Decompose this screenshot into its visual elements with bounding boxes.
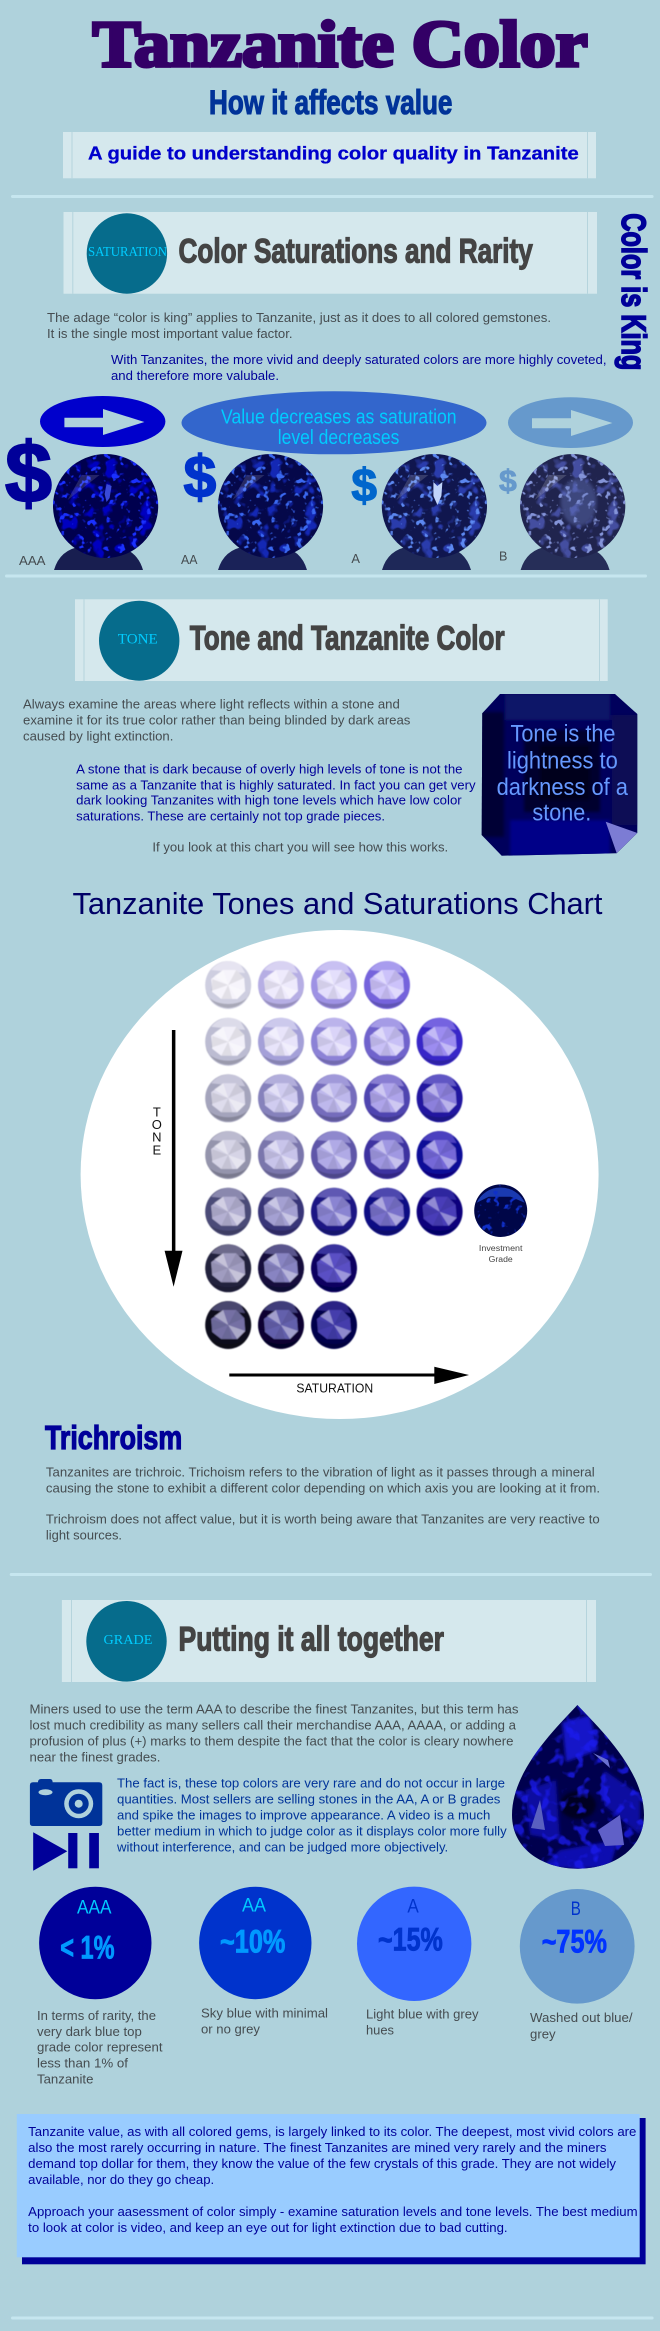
caption: AAA: Tanzanite	[37, 2071, 93, 2086]
text: tone versus saturation: dark looking Tanzanites with high tone levels which have low color	[76, 792, 462, 807]
text: video is better: better medium in which to judge color as it displays color more fully	[117, 1823, 507, 1838]
row: tone 5	[205, 1188, 463, 1236]
grade circle: A: ~15%	[378, 1922, 443, 1958]
vertical label: color is king: Color is King	[614, 213, 652, 370]
chart heading: Tanzanite Tones and Saturations Chart	[72, 886, 603, 921]
panel: tone heading	[75, 599, 608, 681]
chart: tones and saturations	[81, 930, 599, 1419]
caption: AAA: In terms of rarity, the	[37, 2008, 156, 2023]
label: tone axis: T	[153, 1104, 161, 1120]
text: chart lead-in: If you look at this chart you will see how this works.	[152, 839, 448, 854]
row: tone 6	[205, 1244, 357, 1292]
grade circle: AAA: < 1%	[60, 1929, 114, 1965]
caption: AAA: grade color represent	[37, 2039, 163, 2054]
text: color is king intro: It is the single most important value factor.	[47, 326, 292, 341]
label: tone axis: O	[152, 1117, 162, 1132]
grade circle: A	[357, 1887, 471, 2001]
text: examine the stone: examine it for its true color rather than being blinded by dark areas	[23, 712, 411, 727]
gem: AAA	[19, 454, 158, 570]
text: miners: near the finest grades.	[30, 1749, 160, 1764]
caption: AAA: very dark blue top	[37, 2024, 142, 2039]
caption: AA: Sky blue with minimal	[201, 2005, 328, 2020]
row: tone 7	[205, 1301, 357, 1349]
text: trichroism: causing the stone to exhibit a different color depending on which axis you are looking at it from.	[46, 1481, 600, 1496]
guide banner	[63, 132, 596, 178]
text: video is better: quantities. Most sellers are selling stones in the AA, A or B grades	[117, 1791, 501, 1806]
caption: AA: or no grey	[201, 2021, 260, 2036]
icon: dollar medium: $	[184, 444, 216, 510]
summary panel: to look at color is video, and keep an eye out for light extinction due to bad cutting.	[28, 2220, 508, 2235]
grade circle: B: ~75%	[542, 1924, 607, 1960]
arrow oval: light	[508, 397, 633, 448]
label: tone axis: E	[152, 1142, 161, 1158]
text: examine the stone	[23, 696, 411, 743]
grade circle: AAA: AAA	[77, 1897, 112, 1918]
grade circle: B	[520, 1889, 635, 2004]
summary panel: also the most rarely occurring in nature. The finest Tanzanites are mined very rarely and the miners	[28, 2140, 607, 2155]
icon: dollar large: $	[5, 426, 52, 521]
text: miners	[30, 1701, 519, 1764]
gem: B: B	[499, 549, 507, 564]
text: video is better: without interference, and can be judged more objectively.	[116, 1839, 448, 1854]
text: tone versus saturation: A stone that is dark because of overly high levels of tone is not the	[76, 761, 462, 776]
gem callout: tone definition	[480, 692, 640, 858]
panel: grade heading: Putting it all together	[178, 1621, 444, 1659]
text: tone versus saturation	[76, 761, 476, 823]
label: tone axis	[152, 1104, 162, 1158]
caption: B: Washed out blue/	[530, 2010, 633, 2025]
title: Tanzanite Color	[93, 8, 588, 81]
grade circle: A: A	[407, 1896, 419, 1917]
icon: camera	[30, 1779, 102, 1826]
caption: A: Light blue with grey	[366, 2006, 479, 2021]
text: miners: profusion of plus (+) marks to them despite the fact that the color is cleary nowhere	[30, 1733, 514, 1748]
summary panel: available, nor do they go cheap.	[28, 2172, 214, 2187]
text: saturation note: With Tanzanites, the more vivid and deeply saturated colors are more highly coveted,	[111, 352, 606, 367]
subtitle: How it affects value	[209, 84, 452, 122]
icon: dollar smallest: $	[499, 463, 517, 498]
text: video is better: and spike the images to improve appearance. A video is a much	[117, 1807, 490, 1822]
caption: B: grey	[530, 2026, 556, 2041]
panel: grade heading	[62, 1600, 596, 1682]
row: tone 4	[205, 1131, 463, 1179]
callout oval: value decreases: Value decreases as saturation	[221, 406, 457, 428]
text: color is king intro: The adage “color is king” applies to Tanzanite, just as it does to all colored gemstones.	[47, 310, 551, 325]
row: tone 2	[205, 1018, 463, 1066]
text: miners: lost much credibility as many sellers call their merchandise AAA, AAAA, or adding a	[30, 1717, 517, 1732]
label: saturation axis: SATURATION	[296, 1381, 373, 1396]
gem: A	[351, 454, 487, 570]
panel: tone heading: Tone and Tanzanite Color	[190, 620, 505, 658]
heading: trichroism: Trichroism	[45, 1419, 182, 1456]
panel: saturation heading	[64, 212, 597, 294]
text: examine the stone: Always examine the areas where light reflects within a stone and	[23, 696, 400, 711]
panel: tone heading: TONE	[118, 631, 158, 647]
caption: A	[366, 2006, 479, 2037]
panel: grade heading: GRADE	[104, 1633, 152, 1648]
grade circle: AA: AA	[242, 1896, 266, 1917]
gem: investment grade: Grade	[489, 1255, 513, 1264]
panel: saturation heading: SATURATION	[88, 245, 167, 260]
gem: B	[499, 454, 625, 570]
gem callout: tone definition: lightness to	[507, 747, 618, 774]
panel: saturation heading: Color Saturations and Rarity	[178, 233, 533, 271]
caption: B	[530, 2010, 633, 2041]
gem callout: tone definition: darkness of a	[497, 774, 629, 801]
text: trichroism: light sources.	[46, 1527, 122, 1542]
icon: dollar small: $	[351, 459, 377, 511]
text: tone versus saturation: same as a Tanzanite that is highly saturated. In fact you can get very	[76, 777, 476, 792]
grade circle: AA	[199, 1887, 312, 1999]
text: tone versus saturation: saturations. These are certainly not top grade pieces.	[76, 808, 385, 823]
guide banner: A guide to understanding color quality in Tanzanite	[88, 143, 579, 163]
text: trichroism: Tanzanites are trichroic. Trichoism refers to the vibration of light as it passes through a mineral	[46, 1465, 595, 1480]
arrow: saturation axis	[229, 1367, 469, 1384]
gem: investment grade	[474, 1184, 527, 1264]
text: trichroism: Trichroism does not affect value, but it is worth being aware that Tanzanites are very reactive to	[46, 1511, 600, 1526]
text: saturation note: and therefore more valubale.	[111, 368, 279, 383]
callout oval: value decreases: level decreases	[278, 427, 399, 449]
text: examine the stone: caused by light extinction.	[23, 728, 173, 743]
gem: investment grade: Investment	[479, 1244, 523, 1253]
gem callout: tone definition: Tone is the	[510, 721, 616, 748]
arrow oval: dark	[40, 396, 165, 447]
gem: pear cut tanzanite	[510, 1704, 646, 1870]
row: tone 1	[205, 961, 410, 1009]
summary panel: Approach your aasessment of color simply - examine saturation levels and tone levels. The best medium	[28, 2204, 638, 2219]
text: color is king intro	[47, 310, 551, 341]
text: saturation note	[111, 352, 606, 383]
summary panel: Tanzanite value, as with all colored gems, is largely linked to its color. The deepest, most vivid colors are	[28, 2124, 636, 2139]
label: tone axis: N	[152, 1130, 161, 1144]
text: miners: Miners used to use the term AAA to describe the finest Tanzanites, but this term has	[30, 1701, 519, 1716]
gem: A: A	[351, 551, 360, 566]
summary panel: demand top dollar for them, they know the value of the few crystals of this grade. They are not widely	[28, 2156, 617, 2171]
text: trichroism	[46, 1465, 600, 1542]
arrow: tone axis	[165, 1030, 182, 1287]
caption: AAA: less than 1% of	[37, 2055, 128, 2070]
caption: AAA	[37, 2008, 163, 2086]
icon: play pause	[33, 1832, 99, 1871]
gem callout: tone definition: stone.	[532, 800, 591, 827]
text: video is better: The fact is, these top colors are very rare and do not occur in large	[117, 1775, 505, 1790]
callout oval: value decreases	[182, 391, 486, 454]
gem: AAA: AAA	[19, 553, 46, 568]
text: video is better	[116, 1775, 507, 1854]
row: tone 3	[205, 1074, 463, 1122]
grade circle: B: B	[571, 1899, 581, 1920]
grade circle: AA: ~10%	[220, 1924, 285, 1960]
gem: AA: AA	[181, 552, 198, 567]
gem: AA	[181, 454, 323, 570]
summary panel	[17, 2114, 646, 2264]
grade circle: AAA	[39, 1887, 151, 1999]
caption: AA	[201, 2005, 328, 2036]
caption: A: hues	[366, 2022, 394, 2037]
